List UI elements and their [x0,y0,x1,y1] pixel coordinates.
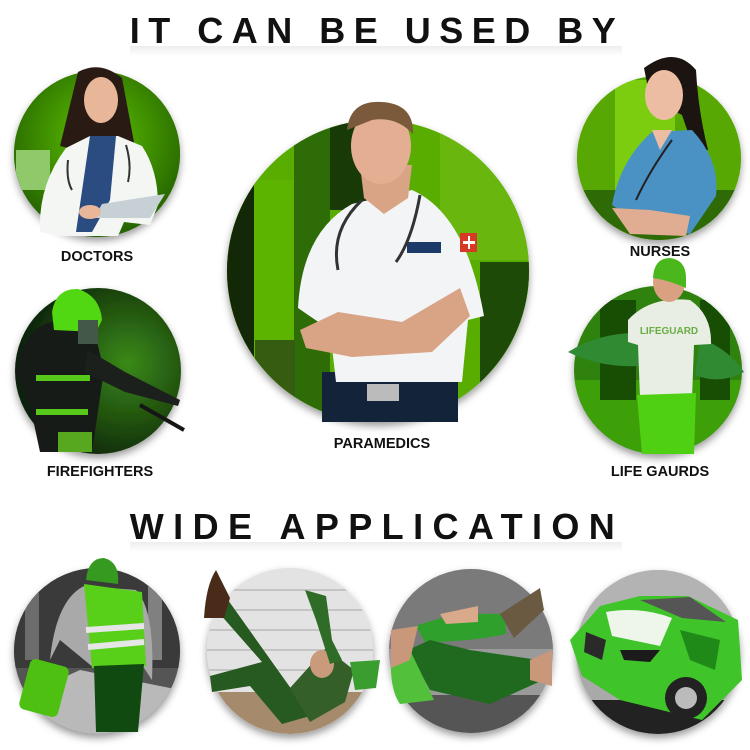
panel: firefighters [15,288,184,454]
panel: rescue worker [14,558,180,734]
icon: leg injury figure [391,588,552,704]
icon: doctor figure [40,67,165,236]
label: doctors: DOCTORS [61,249,133,265]
icon: lifeguard figure [568,258,744,454]
title: it can be used by: IT CAN BE USED BY [130,10,624,51]
panel: nurses [577,57,741,240]
icon: firefighter figure [16,289,184,452]
label: life guards: LIFE GAURDS [611,464,709,480]
icon: rescue worker figure [18,558,152,732]
panel: falling man [204,568,380,734]
panel: paramedics [227,102,530,422]
label: paramedics: PARAMEDICS [334,436,431,452]
panel: leg injury [389,569,553,735]
panel: doctors [14,67,180,237]
label: nurses: NURSES [630,244,691,260]
icon: lifeguard figure: LIFEGUARD [640,326,698,337]
icon: falling man figure [204,570,380,724]
label: firefighters: FIREFIGHTERS [47,464,153,480]
icon: paramedic figure [298,102,484,422]
panel: life guards [568,258,744,460]
panel: crashed car [570,570,742,734]
icon: nurse figure [612,57,716,236]
title: wide application: WIDE APPLICATION [130,506,624,547]
icon: crashed car [570,596,742,720]
